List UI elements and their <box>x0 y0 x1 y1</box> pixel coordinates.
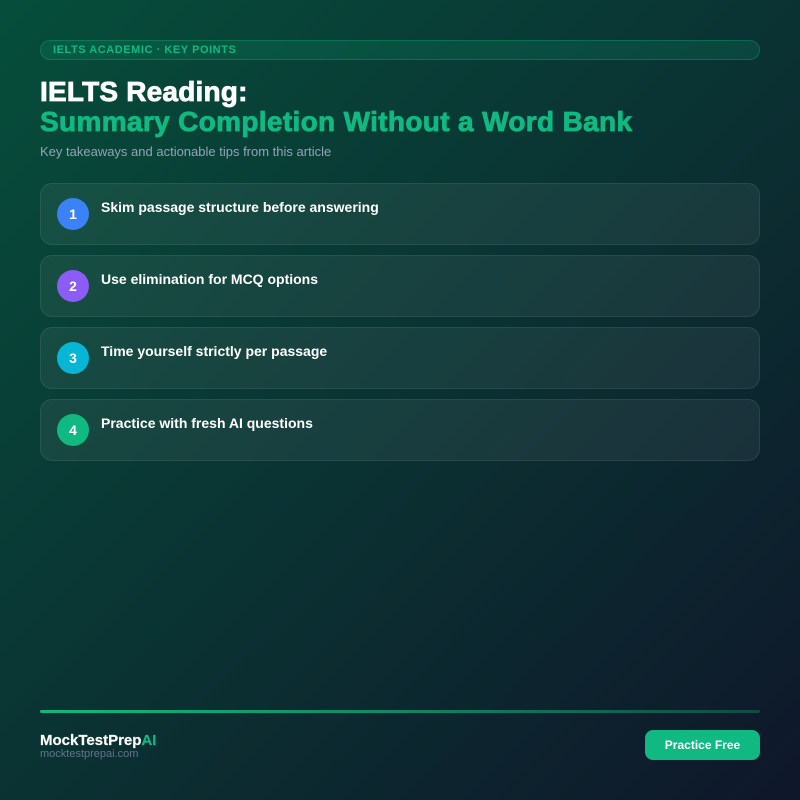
tip 3 text: Time yourself strictly per passage <box>101 343 327 359</box>
call to action button: Practice Free <box>665 738 740 752</box>
tip 2 text: Use elimination for MCQ options <box>101 271 318 287</box>
title: IELTS Reading: <box>40 76 248 107</box>
panel: tip 1 <box>40 183 760 245</box>
tip 1 text: Skim passage structure before answering <box>101 199 379 215</box>
badge: category label <box>40 40 760 60</box>
tip 4 text: Practice with fresh AI questions <box>101 415 313 431</box>
icon: number 3 <box>57 342 89 374</box>
icon: number 3: 3 <box>69 350 77 366</box>
icon: number 2 <box>57 270 89 302</box>
icon: number 1: 1 <box>69 206 77 222</box>
website url: mocktestprepai.com <box>40 748 138 760</box>
title <box>40 76 633 138</box>
title: Summary Completion Without a Word Bank <box>40 106 632 137</box>
panel: tip 4 <box>40 399 760 461</box>
panel: tip 3 <box>40 327 760 389</box>
icon: number 4: 4 <box>69 422 77 438</box>
icon: number 2: 2 <box>69 278 77 294</box>
subtitle: Key takeaways and actionable tips from this article <box>40 144 331 159</box>
panel: tip 2 <box>40 255 760 317</box>
icon: number 4 <box>57 414 89 446</box>
badge: category label: IELTS ACADEMIC · KEY POINTS <box>53 44 236 56</box>
icon: number 1 <box>57 198 89 230</box>
call to action button <box>645 730 760 760</box>
brand name: MockTestPrepAI <box>40 732 156 749</box>
